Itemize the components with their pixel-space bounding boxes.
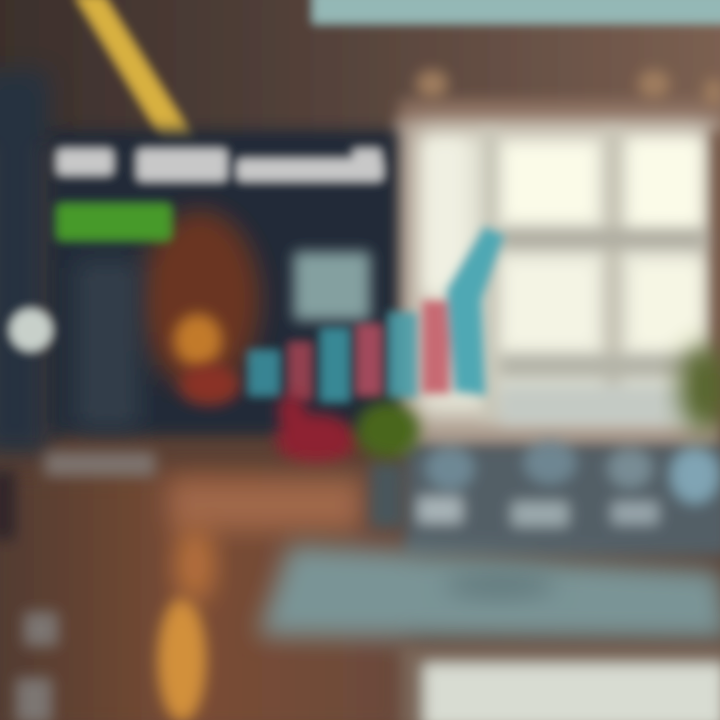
chart rising arrow bbox=[446, 226, 505, 396]
dark base at left bbox=[0, 470, 16, 540]
ceiling bbox=[0, 0, 720, 145]
window panes bbox=[425, 130, 720, 425]
sofa bbox=[405, 440, 720, 555]
rug shadow bbox=[444, 571, 556, 599]
ceiling spotlights bbox=[416, 70, 720, 106]
left dark wall bbox=[0, 70, 50, 455]
orange floor reflection bbox=[158, 527, 215, 720]
right wall and window frame bbox=[395, 120, 720, 450]
heading text block, illegible in reference bbox=[56, 148, 384, 182]
dark central panel bbox=[48, 130, 398, 435]
floor bbox=[0, 468, 410, 720]
white circular icon bbox=[9, 308, 53, 352]
rug bbox=[258, 545, 720, 640]
green badge bbox=[56, 203, 172, 241]
shelving bbox=[75, 260, 140, 430]
bright floor, bottom right bbox=[400, 645, 720, 720]
red armchair bbox=[276, 394, 356, 466]
bar chart bbox=[248, 226, 505, 402]
chart panel bbox=[294, 252, 370, 320]
right plant bbox=[680, 344, 720, 432]
warm fireplace glow bbox=[140, 210, 260, 405]
warm floor band bbox=[170, 480, 360, 530]
ceiling skylight bbox=[312, 0, 720, 24]
pale floor patch bbox=[45, 452, 155, 476]
potted plant bbox=[356, 402, 420, 528]
window bbox=[415, 128, 710, 418]
grey floor reflections bbox=[16, 612, 58, 720]
yellow ceiling light strip bbox=[74, 0, 200, 152]
